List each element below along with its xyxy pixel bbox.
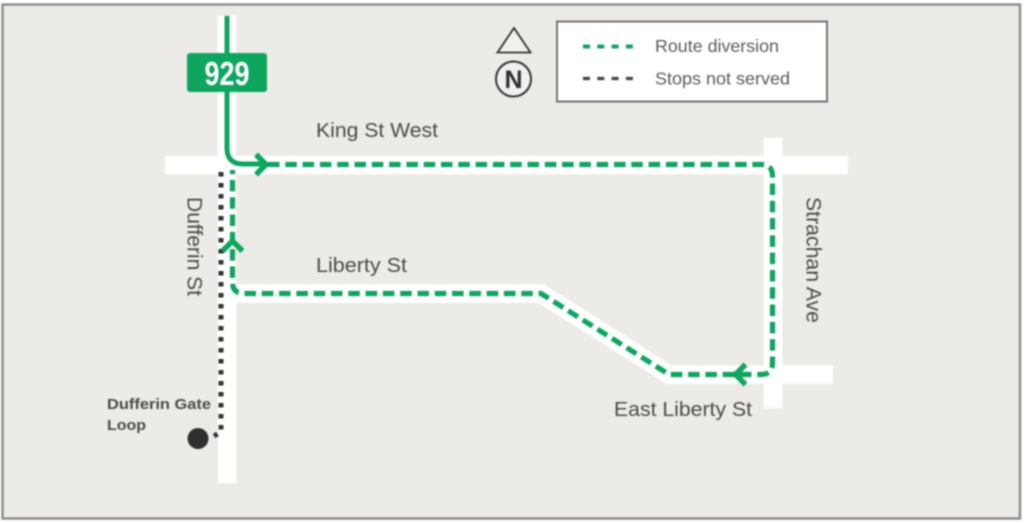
- route badge 929: [187, 53, 267, 92]
- arrow: eastbound on King St: [256, 154, 266, 174]
- route badge 929: 929: [204, 55, 250, 92]
- route diversion dashed line: [232, 164, 772, 374]
- arrow: westbound on East Liberty St: [736, 364, 746, 384]
- stops not served dotted line: [214, 172, 221, 436]
- label: Dufferin Gate Loop: Loop: [107, 417, 146, 434]
- legend: stops not served swatch: [583, 77, 633, 80]
- route 929 solid line: [227, 16, 262, 164]
- stop marker: Dufferin Gate Loop: [188, 428, 208, 449]
- label: King St West: King St West: [316, 119, 438, 142]
- label: Strachan Ave: Strachan Ave: [802, 197, 826, 323]
- label: Liberty St: Liberty St: [316, 254, 407, 277]
- road network: [165, 16, 848, 483]
- legend: route diversion swatch: [583, 44, 633, 48]
- label: East Liberty St: East Liberty St: [614, 398, 752, 421]
- legend: stops not served text: Stops not served: [655, 68, 790, 88]
- north arrow: [496, 28, 531, 96]
- legend: route diversion text: Route diversion: [655, 36, 779, 56]
- north arrow: N: [504, 66, 523, 94]
- arrow: northbound on Dufferin St: [222, 241, 242, 251]
- street labels: [182, 119, 826, 421]
- label: Dufferin Gate Loop: Dufferin Gate: [107, 396, 211, 413]
- label: Dufferin St: Dufferin St: [182, 197, 206, 296]
- legend: [557, 22, 827, 102]
